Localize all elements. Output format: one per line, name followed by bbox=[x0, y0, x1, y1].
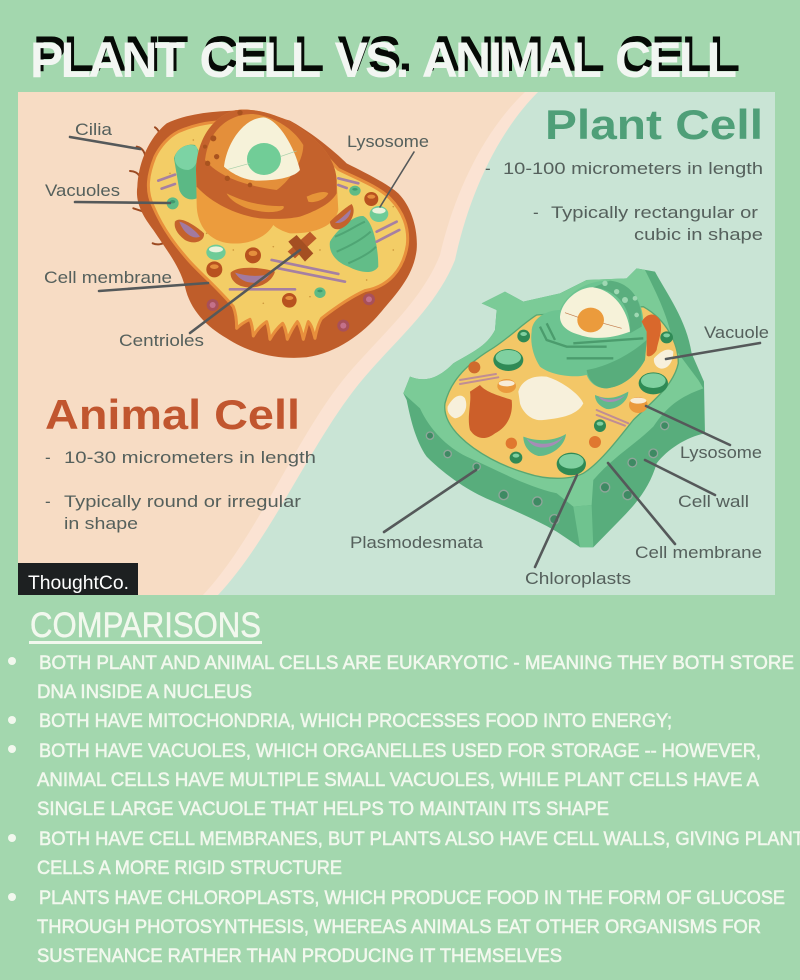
green stack bbox=[174, 145, 198, 199]
heading: animal cell: Animal Cell bbox=[45, 391, 300, 438]
comparison text lines: SUSTENANCE RATHER THAN PRODUCING IT THEMSELVES bbox=[37, 946, 562, 967]
orange vesicles bbox=[468, 361, 648, 449]
chloroplasts bbox=[493, 330, 673, 475]
comparison text lines: BOTH HAVE MITOCHONDRIA, WHICH PROCESSES FOOD INTO ENERGY; bbox=[39, 711, 672, 732]
plant cell labels bbox=[350, 324, 769, 588]
comparison text lines: CELLS A MORE RIGID STRUCTURE bbox=[37, 858, 342, 879]
comparison text lines: THROUGH PHOTOSYNTHESIS, WHEREAS ANIMALS EAT OTHER ORGANISMS FOR bbox=[37, 917, 761, 938]
text: animal cell facts: 10-30 micrometers in length bbox=[64, 448, 316, 467]
vesicles bbox=[207, 293, 375, 332]
plant cell labels: Lysosome bbox=[680, 444, 762, 462]
list: comparisons bbox=[8, 653, 800, 967]
text: plant cell facts bbox=[485, 159, 763, 244]
text: plant cell facts: - bbox=[485, 159, 491, 178]
text: plant cell facts: cubic in shape bbox=[634, 225, 763, 244]
nucleus bbox=[196, 110, 338, 244]
title: PLANT CELL VS. ANIMAL CELL bbox=[33, 26, 740, 82]
plant cell labels: Plasmodesmata bbox=[350, 534, 484, 552]
illustration: animal cell bbox=[130, 110, 417, 358]
heading: plant cell: Plant Cell bbox=[545, 101, 763, 148]
text: animal cell facts: - bbox=[45, 448, 51, 467]
text: animal cell facts bbox=[45, 448, 316, 533]
title: PLANT CELL VS. ANIMAL CELL bbox=[30, 32, 737, 88]
animal cell leader lines bbox=[70, 137, 414, 333]
logo: ThoughtCo bbox=[18, 563, 138, 595]
filaments bbox=[460, 374, 628, 426]
plant cell labels: Vacuole bbox=[704, 324, 769, 342]
comparison text lines bbox=[37, 653, 800, 967]
text: animal cell facts: in shape bbox=[64, 514, 138, 533]
animal cell labels: Lysosome bbox=[347, 133, 429, 151]
comparison text lines: PLANTS HAVE CHLOROPLASTS, WHICH PRODUCE FOOD IN THE FORM OF GLUCOSE bbox=[39, 888, 785, 909]
heading: comparisons: COMPARISONS bbox=[30, 606, 261, 645]
mitochondria bbox=[175, 204, 354, 288]
animal cell labels bbox=[44, 121, 429, 350]
text: animal cell facts: Typically round or irregular bbox=[64, 492, 301, 511]
illustration: plant cell bbox=[403, 268, 705, 547]
animal cell labels: Vacuoles bbox=[45, 182, 120, 200]
golgi orange bbox=[642, 315, 661, 356]
comparison text lines: BOTH PLANT AND ANIMAL CELLS ARE EUKARYOTIC - MEANING THEY BOTH STORE bbox=[39, 653, 794, 674]
small organelles bbox=[167, 186, 388, 308]
plant cell labels: Chloroplasts bbox=[525, 570, 631, 588]
bullet points bbox=[8, 657, 16, 901]
comparison text lines: BOTH HAVE VACUOLES, WHICH ORGANELLES USED FOR STORAGE -- HOWEVER, bbox=[39, 741, 761, 762]
large vacuole bbox=[518, 376, 583, 420]
animal cell labels: Centrioles bbox=[119, 332, 204, 350]
plant cell labels: Cell wall bbox=[678, 493, 749, 511]
plasmodesmata bbox=[426, 422, 669, 524]
logo: ThoughtCo: ThoughtCo. bbox=[28, 573, 129, 594]
animal cell labels: Cilia bbox=[75, 121, 113, 139]
text: plant cell facts: Typically rectangular or bbox=[551, 203, 758, 222]
animal cell labels: Cell membrane bbox=[44, 269, 172, 287]
orange ER body bbox=[469, 385, 512, 438]
plant cell labels: Cell membrane bbox=[635, 544, 762, 562]
comparison text lines: SINGLE LARGE VACUOLE THAT HELPS TO MAINTAIN ITS SHAPE bbox=[37, 799, 609, 820]
comparison text lines: ANIMAL CELLS HAVE MULTIPLE SMALL VACUOLES, WHILE PLANT CELLS HAVE A bbox=[37, 770, 759, 791]
mitochondria bbox=[523, 392, 628, 456]
text: plant cell facts: 10-100 micrometers in length bbox=[503, 159, 763, 178]
centrioles bbox=[288, 232, 317, 262]
panel: cell diagram bbox=[18, 92, 775, 595]
nucleus bbox=[531, 281, 647, 388]
filaments bbox=[158, 175, 399, 289]
comparison text lines: DNA INSIDE A NUCLEUS bbox=[37, 682, 252, 703]
green golgi body bbox=[330, 216, 378, 272]
text: animal cell facts: - bbox=[45, 492, 51, 511]
text: plant cell facts: - bbox=[533, 203, 539, 222]
plant cell leader lines bbox=[384, 343, 760, 567]
